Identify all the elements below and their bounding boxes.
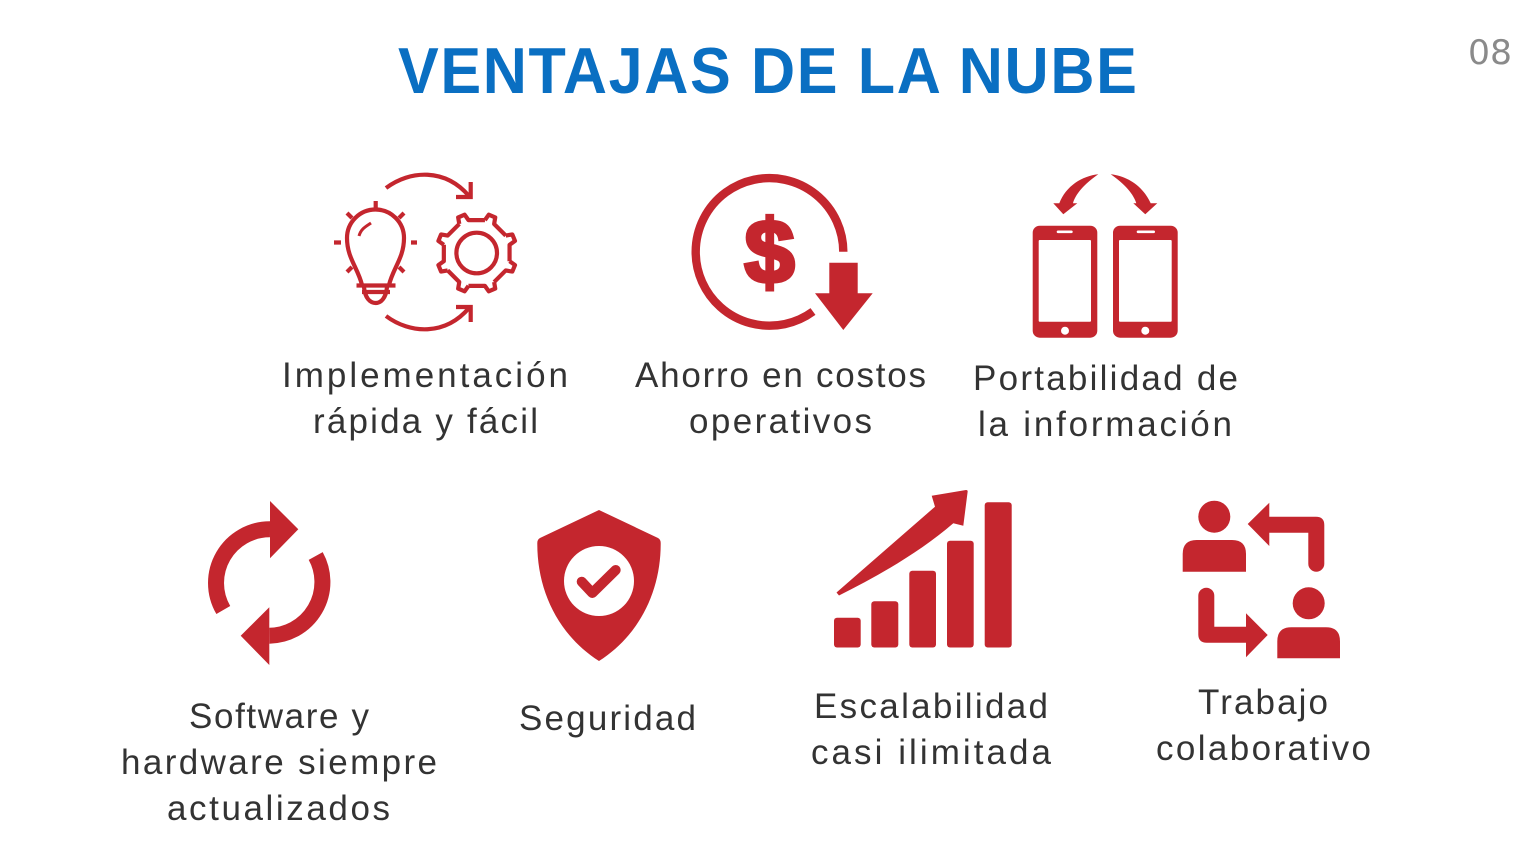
- icon: dollar with down arrow: [696, 178, 873, 330]
- label: [1156, 683, 1371, 768]
- label: rápida y fácil: [313, 402, 538, 441]
- label: la información: [978, 405, 1232, 444]
- panel: trabajo colaborativo: [1156, 501, 1371, 768]
- panel: portabilidad de la información: [973, 174, 1238, 444]
- label: [973, 359, 1238, 444]
- label: [635, 356, 926, 441]
- panel: seguridad: [519, 510, 696, 738]
- label: operativos: [689, 402, 872, 441]
- page number: 08: [1468, 33, 1512, 73]
- icon: people exchanging arrows: [1183, 501, 1340, 658]
- title: VENTAJAS DE LA NUBE: [398, 35, 1137, 107]
- label: Trabajo: [1198, 683, 1328, 722]
- label: actualizados: [167, 789, 390, 828]
- icon: two phones with arrows: [1033, 174, 1178, 338]
- label: Software y: [189, 697, 370, 736]
- label: Implementación: [282, 356, 568, 395]
- icon: dollar with down arrow: $: [744, 203, 795, 303]
- panel: escalabilidad casi ilimitada: [811, 490, 1052, 772]
- icon: rising bars with arrow: [834, 490, 1012, 648]
- label: Ahorro en costos: [635, 356, 926, 395]
- label: Portabilidad de: [973, 359, 1238, 398]
- panel: ahorro en costos operativos: [635, 178, 926, 441]
- icon: shield with check: [537, 510, 661, 661]
- label: [811, 687, 1052, 772]
- label: [282, 356, 568, 441]
- label: casi ilimitada: [811, 733, 1052, 772]
- icon: bulb, gear and arrows: [334, 175, 521, 329]
- label: Seguridad: [519, 699, 696, 738]
- label: colaborativo: [1156, 729, 1371, 768]
- label: hardware siempre: [121, 743, 437, 782]
- label: Escalabilidad: [814, 687, 1048, 726]
- panel: implementación rápida y fácil: [282, 175, 568, 441]
- icon: refresh arrows: [216, 501, 322, 665]
- panel: software y hardware siempre actualizados: [121, 501, 437, 828]
- label: [121, 697, 437, 828]
